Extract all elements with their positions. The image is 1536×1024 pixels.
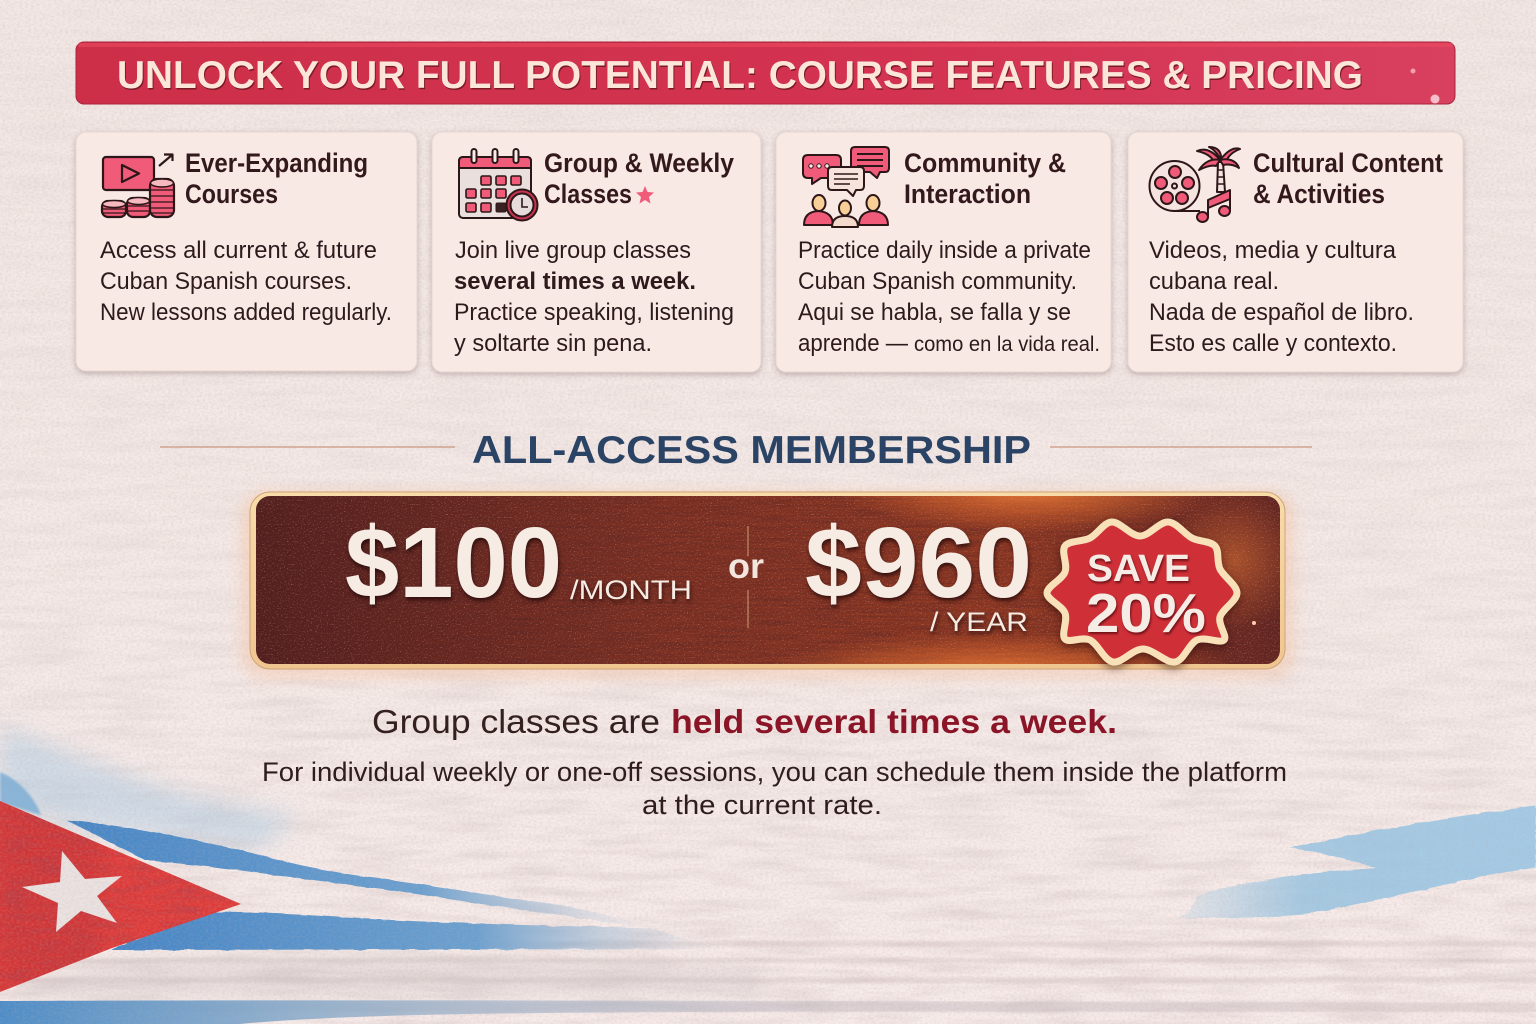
- body: Practice speaking, listening: [454, 299, 734, 326]
- icon: video and coin stacks: [102, 154, 174, 217]
- body: Practice daily inside a private: [798, 237, 1091, 264]
- heading: Community &: [904, 148, 1066, 178]
- body: y soltarte sin pena.: [454, 330, 652, 357]
- body: Join live group classes: [455, 237, 691, 264]
- heading: [1253, 148, 1443, 209]
- blue strip: bottom edge: [0, 1000, 1536, 1024]
- panel: Ever-Expanding Courses: [76, 132, 417, 371]
- panel: Community & Interaction: [776, 132, 1111, 372]
- body: [454, 237, 734, 357]
- decoration: flag streaks, bottom right: [1178, 806, 1536, 918]
- title banner: [76, 42, 1455, 104]
- icon: chat bubbles and people: [803, 147, 889, 227]
- text: individual sessions note: [262, 757, 1287, 820]
- body: Aqui se habla, se falla y se: [798, 299, 1071, 326]
- icon: film reel, palm and music note: [1150, 147, 1240, 222]
- text: group classes note: Group classes are: [372, 703, 660, 740]
- title banner: UNLOCK YOUR FULL POTENTIAL: COURSE FEATURES & PRICING: [117, 54, 1363, 97]
- text: group classes note: [372, 703, 1117, 740]
- panel: Group & Weekly Classes: [432, 132, 761, 372]
- text: individual sessions note: at the current rate.: [642, 790, 882, 820]
- badge: save 20%: [1047, 522, 1237, 662]
- price: monthly: [345, 507, 692, 619]
- body: several times a week.: [454, 268, 696, 295]
- text: individual sessions note: For individual weekly or one-off sessions, you can schedule them inside the platform: [262, 757, 1287, 787]
- grey wash under flag: [0, 955, 760, 998]
- price: yearly: / YEAR: [930, 607, 1028, 637]
- body: Nada de español de libro.: [1149, 299, 1414, 326]
- background: textured paper: [10, 648, 1536, 1024]
- red triangle: [0, 800, 245, 995]
- price: monthly: /MONTH: [570, 575, 692, 605]
- heading: Courses: [185, 179, 278, 209]
- body: [1149, 237, 1414, 357]
- or: or: [728, 547, 764, 586]
- body: New lessons added regularly.: [100, 299, 392, 326]
- body: como en la vida real.: [914, 333, 1100, 356]
- heading: Classes: [544, 179, 632, 209]
- body: aprende —: [798, 330, 908, 357]
- panel: pricing: [237, 487, 1298, 683]
- blue stripe: upper: [66, 820, 660, 928]
- heading: [904, 148, 1066, 209]
- heading: Ever-Expanding: [185, 148, 368, 178]
- badge: save 20%: 20%: [1086, 582, 1206, 644]
- icon: star: [636, 186, 654, 204]
- body: cubana real.: [1149, 268, 1279, 295]
- body: [798, 237, 1100, 357]
- heading: Cultural Content: [1253, 148, 1443, 178]
- body: Cuban Spanish courses.: [100, 268, 352, 295]
- body: [100, 237, 392, 326]
- body: Cuban Spanish community.: [798, 268, 1077, 295]
- heading: [185, 148, 368, 209]
- heading: Group & Weekly: [544, 148, 734, 178]
- decoration: Cuban flag, bottom left: [0, 723, 1190, 1024]
- heading: All-Access Membership: ALL-ACCESS MEMBERSHIP: [472, 429, 1031, 472]
- badge: save 20%: SAVE: [1087, 548, 1190, 590]
- heading: Interaction: [904, 179, 1031, 209]
- divider: [747, 526, 749, 628]
- text: group classes note: held several times a week.: [671, 703, 1117, 740]
- white star: [22, 851, 122, 932]
- heading: & Activities: [1253, 179, 1385, 209]
- title text: UNLOCK YOUR FULL POTENTIAL: COURSE FEATURES & PRICING: [118, 56, 1364, 98]
- body: Esto es calle y contexto.: [1149, 330, 1397, 357]
- panel: Cultural Content & Activities: [1128, 132, 1463, 372]
- body: Videos, media y cultura: [1149, 237, 1397, 264]
- price: monthly: $100: [345, 507, 562, 619]
- price: yearly: $960: [805, 507, 1032, 619]
- icon: calendar with clock: [459, 149, 538, 220]
- blue stripe: lower: [112, 912, 720, 950]
- body: Access all current & future: [100, 237, 377, 264]
- heading: [544, 148, 734, 209]
